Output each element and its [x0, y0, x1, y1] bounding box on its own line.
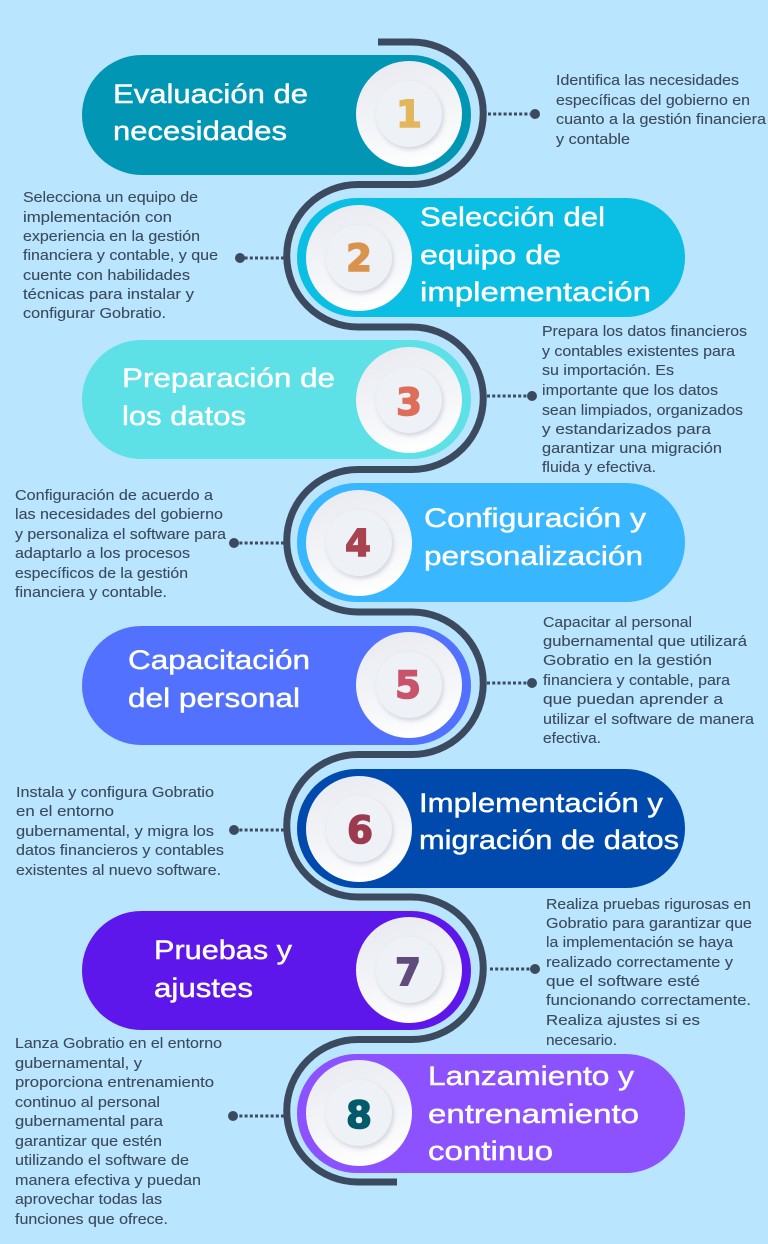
panel: step 4 — [297, 483, 685, 602]
text block 5: efectiva. — [543, 731, 601, 747]
text block 7: necesario. — [546, 1033, 617, 1049]
text block 1: específicas del gobierno en — [556, 93, 750, 109]
heading 2: implementación — [420, 277, 651, 307]
text block 2: configurar Gobratio. — [23, 306, 166, 322]
number badge 3: 3 — [396, 381, 422, 424]
text block 7: Gobratio para garantizar que — [546, 916, 752, 932]
text block 1: y contable — [556, 132, 630, 148]
text block 8: aprovechar todas las — [15, 1192, 162, 1208]
text block 5: Gobratio en la gestión — [543, 653, 712, 669]
heading 1 — [113, 79, 308, 146]
text block 1: cuanto a la gestión financiera — [556, 112, 766, 128]
text block 2: financiera y contable, y que — [23, 248, 218, 264]
text block 7 — [546, 897, 752, 1049]
text block 7: la implementación se haya — [546, 935, 733, 951]
text block 7: Realiza ajustes si es — [546, 1013, 700, 1029]
number badge 5: 5 — [395, 664, 421, 707]
heading 1: Evaluación de — [113, 79, 308, 109]
heading 3 — [122, 363, 335, 431]
connector 2 — [235, 253, 284, 263]
heading 5 — [128, 645, 310, 713]
panel: step 2 — [297, 198, 685, 317]
heading 5: del personal — [128, 683, 300, 713]
pill 5 — [82, 626, 471, 745]
connector 5 — [487, 678, 537, 688]
number badge 2: 2 — [346, 237, 372, 280]
heading 7 — [154, 935, 293, 1003]
text block 8: gubernamental, y — [15, 1056, 143, 1072]
text block 8: manera efectiva y puedan — [15, 1173, 201, 1189]
text block 6: gubernamental, y migra los — [16, 824, 214, 840]
text block 6: datos financieros y contables — [16, 843, 224, 859]
text block 8: funciones que ofrece. — [15, 1212, 168, 1228]
text block 2: cuente con habilidades — [23, 268, 190, 284]
text block 3: Prepara los datos financieros — [542, 324, 747, 340]
text block 1 — [556, 73, 766, 148]
text block 3: y estandarizados para — [542, 422, 711, 438]
text block 3: sean limpiados, organizados — [542, 403, 743, 419]
number badge 7: 7 — [395, 951, 421, 994]
heading 8 — [428, 1061, 639, 1166]
panel: step 1 — [82, 55, 471, 175]
heading 6 — [419, 788, 679, 855]
heading 3: los datos — [122, 401, 246, 431]
text block 5: gubernamental que utilizará — [543, 634, 747, 650]
heading 7: ajustes — [154, 973, 253, 1003]
heading 3: Preparación de — [122, 363, 335, 393]
text block 3 — [542, 324, 747, 476]
pill 4 — [297, 483, 685, 602]
text block 8: proporciona entrenamiento — [15, 1075, 214, 1091]
number badge 8: 8 — [346, 1094, 372, 1137]
text block 2 — [23, 190, 218, 322]
text block 4: las necesidades del gobierno — [15, 507, 223, 523]
text block 5: que puedan aprender a — [543, 692, 723, 708]
panel: step 5 — [82, 626, 471, 745]
number badge 7 — [356, 917, 462, 1023]
number badge 5 — [356, 632, 462, 738]
text block 7: que el software esté — [546, 974, 700, 990]
text block 4: adaptarlo a los procesos — [15, 546, 190, 562]
text block 3: garantizar una migración — [542, 441, 722, 457]
number badge 3 — [356, 347, 462, 453]
text block 3: su importación. Es — [542, 363, 674, 379]
panel: step 8 — [297, 1054, 685, 1173]
text block 4: Configuración de acuerdo a — [15, 488, 213, 504]
text block 8: Lanza Gobratio en el entorno — [15, 1036, 222, 1052]
number badge 8 — [306, 1060, 412, 1166]
text block 7: funcionando correctamente. — [546, 993, 751, 1009]
heading 2 — [420, 202, 651, 307]
number badge 4 — [306, 490, 412, 596]
number badge 4: 4 — [345, 522, 371, 565]
heading 2: equipo de — [420, 240, 561, 270]
text block 4: y personaliza el software para — [15, 527, 226, 543]
text block 5: utilizar el software de manera — [543, 712, 754, 728]
text block 1: Identifica las necesidades — [556, 73, 739, 89]
pill 3 — [82, 340, 471, 459]
connector 6 — [229, 825, 284, 835]
text block 4: específicos de la gestión — [15, 566, 188, 582]
pill 6 — [297, 769, 685, 888]
panel: step 6 — [297, 769, 685, 888]
pill 7 — [82, 911, 471, 1030]
heading 4: Configuración y — [424, 503, 647, 533]
heading 6: Implementación y — [419, 788, 664, 818]
pill 2 — [297, 198, 685, 317]
heading 4: personalización — [424, 541, 643, 571]
connector 8 — [228, 1111, 284, 1121]
text block 8: utilizando el software de — [15, 1153, 189, 1169]
connector 3 — [487, 391, 537, 401]
text block 8 — [15, 1036, 222, 1228]
heading 8: Lanzamiento y — [428, 1061, 635, 1091]
heading 6: migración de datos — [419, 825, 679, 855]
heading 5: Capacitación — [128, 645, 310, 675]
heading 8: continuo — [428, 1136, 553, 1166]
heading 4 — [424, 503, 647, 571]
pill 8 — [297, 1054, 685, 1173]
text block 2: implementación con — [23, 210, 172, 226]
text block 7: Realiza pruebas rigurosas en — [546, 897, 751, 913]
number badge 6: 6 — [347, 809, 373, 852]
text block 3: y contables existentes para — [542, 344, 735, 360]
text block 8: garantizar que estén — [15, 1134, 162, 1150]
text block 8: continuo al personal — [15, 1095, 160, 1111]
winding path line — [287, 42, 483, 1182]
connector 7 — [490, 964, 540, 974]
heading 7: Pruebas y — [154, 935, 293, 965]
text block 6 — [16, 785, 224, 879]
connector 1 — [488, 109, 540, 119]
pill 1 — [82, 55, 471, 175]
text block 5: financiera y contable, para — [543, 673, 730, 689]
number badge 1: 1 — [396, 93, 422, 136]
number badge 2 — [306, 205, 412, 311]
text block 6: existentes al nuevo software. — [16, 863, 221, 879]
number badge 6 — [306, 776, 412, 882]
heading 1: necesidades — [113, 116, 287, 146]
panel: step 3 — [82, 340, 471, 459]
text block 5: Capacitar al personal — [543, 615, 692, 631]
number badge 1 — [356, 61, 462, 167]
text block 3: importante que los datos — [542, 383, 718, 399]
heading 2: Selección del — [420, 202, 605, 232]
text block 4: financiera y contable. — [15, 585, 167, 601]
text block 6: en el entorno — [16, 804, 114, 820]
text block 6: Instala y configura Gobratio — [16, 785, 214, 801]
text block 7: realizado correctamente y — [546, 955, 734, 971]
text block 2: técnicas para instalar y — [23, 287, 195, 303]
text block 2: experiencia en la gestión — [23, 229, 200, 245]
panel: step 7 — [82, 911, 471, 1030]
heading 8: entrenamiento — [428, 1099, 639, 1129]
connector 4 — [229, 538, 284, 548]
text block 8: gubernamental para — [15, 1114, 163, 1130]
text block 3: fluida y efectiva. — [542, 460, 656, 476]
text block 2: Selecciona un equipo de — [23, 190, 198, 206]
text block 4 — [15, 488, 226, 601]
text block 5 — [543, 615, 754, 747]
